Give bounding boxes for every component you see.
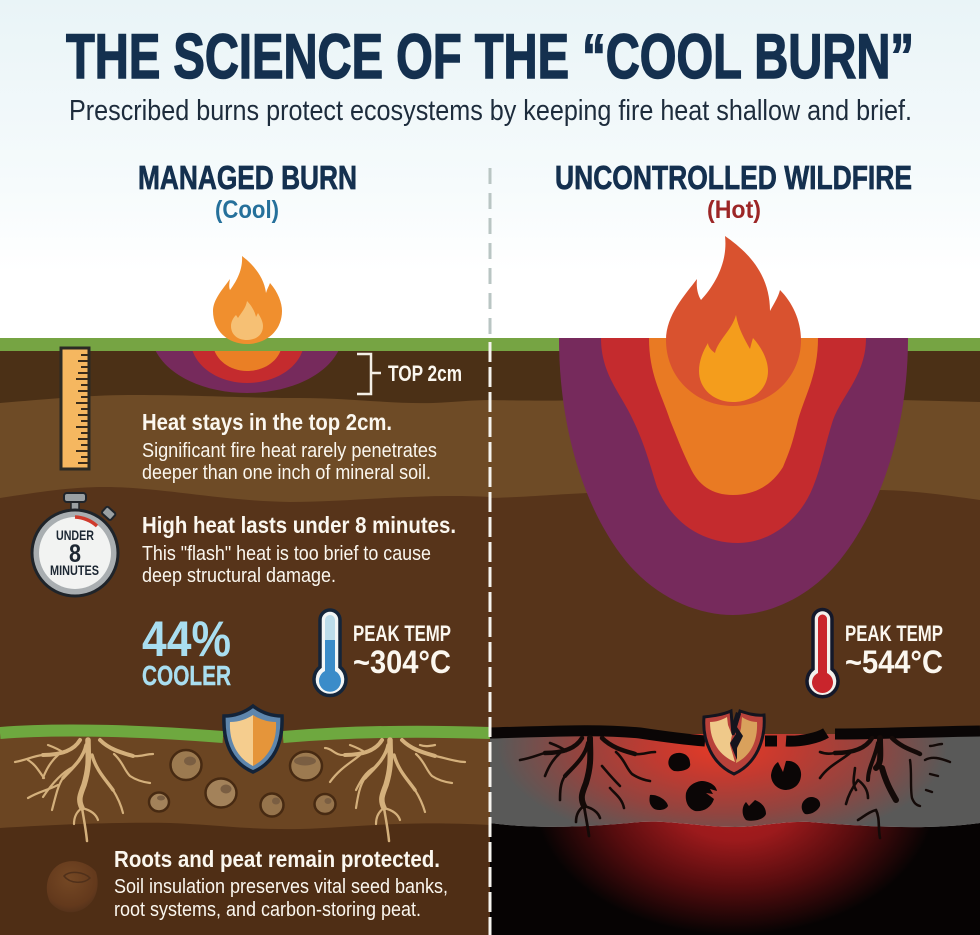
icon: stopwatch: UNDER — [56, 527, 94, 543]
icon: stopwatch: MINUTES — [50, 562, 99, 578]
icon: peat clump — [47, 861, 98, 912]
charred pebbles — [649, 753, 820, 821]
panel: uncontrolled wildfire — [490, 159, 980, 935]
stat: peak temp hot: PEAK TEMP — [845, 621, 943, 646]
icon: root system left — [15, 740, 153, 841]
icon: hot thermometer — [807, 610, 838, 697]
text block: heat duration — [142, 512, 456, 587]
divider: upper dashed line — [488, 168, 492, 338]
stat: peak temp hot: ~544°C — [845, 644, 943, 680]
sky background — [0, 0, 980, 340]
bracket: top 2cm — [357, 354, 381, 394]
stat: 44% cooler: 44% — [142, 611, 231, 667]
stat: peak temp cool — [353, 621, 451, 680]
icon: burnt roots right — [820, 738, 950, 838]
icon: small flame — [213, 256, 282, 344]
heat zones: shallow — [153, 345, 341, 393]
surface grass — [0, 338, 490, 351]
icon: cool thermometer — [314, 610, 346, 695]
grass line — [0, 730, 490, 737]
stat: 44% cooler: COOLER — [142, 660, 231, 691]
icon: cracked shield — [704, 711, 764, 774]
heat zones: deep — [559, 338, 908, 615]
soil layers — [490, 345, 980, 745]
icon: ruler — [61, 348, 89, 469]
icon: stopwatch: 8 — [69, 540, 81, 568]
scorched deep layer — [490, 822, 980, 935]
text block: heat depth: deeper than one inch of mineral soil. — [142, 461, 431, 484]
stat: peak temp hot — [845, 621, 943, 680]
stat: peak temp cool: ~304°C — [353, 644, 451, 680]
pebbles — [149, 750, 336, 816]
heading: managed burn: MANAGED BURN — [138, 159, 357, 196]
icon: burnt roots left — [520, 738, 655, 836]
text block: roots and peat — [114, 846, 448, 921]
panel: managed burn — [0, 159, 490, 935]
text block: heat depth — [142, 409, 437, 484]
divider: lower dashed line — [488, 342, 492, 935]
subheading: cool: (Cool) — [215, 196, 279, 224]
icon: root system right — [325, 740, 465, 841]
icon: shield intact — [224, 706, 282, 772]
stat: 44% cooler — [142, 611, 231, 691]
text block: roots and peat: Soil insulation preserves vital seed banks, — [114, 875, 448, 898]
icon: large flame — [666, 236, 801, 406]
label: top 2cm: TOP 2cm — [388, 361, 462, 386]
text block: heat duration: High heat lasts under 8 minutes. — [142, 512, 456, 538]
text block: heat depth: Significant fire heat rarely penetrates — [142, 439, 437, 462]
stat: peak temp cool: PEAK TEMP — [353, 621, 451, 646]
scorched band — [490, 734, 980, 827]
surface grass — [490, 338, 980, 351]
text block: roots and peat: Roots and peat remain protected. — [114, 846, 440, 872]
icon: stopwatch — [32, 493, 118, 596]
text block: heat duration: deep structural damage. — [142, 564, 336, 587]
subheading: hot: (Hot) — [707, 196, 761, 224]
charred surface line — [490, 731, 980, 741]
soil layers — [0, 345, 490, 935]
text block: heat depth: Heat stays in the top 2cm. — [142, 409, 392, 435]
text block: roots and peat: root systems, and carbon-storing peat. — [114, 898, 421, 921]
text block: heat duration: This "flash" heat is too brief to cause — [142, 542, 431, 565]
